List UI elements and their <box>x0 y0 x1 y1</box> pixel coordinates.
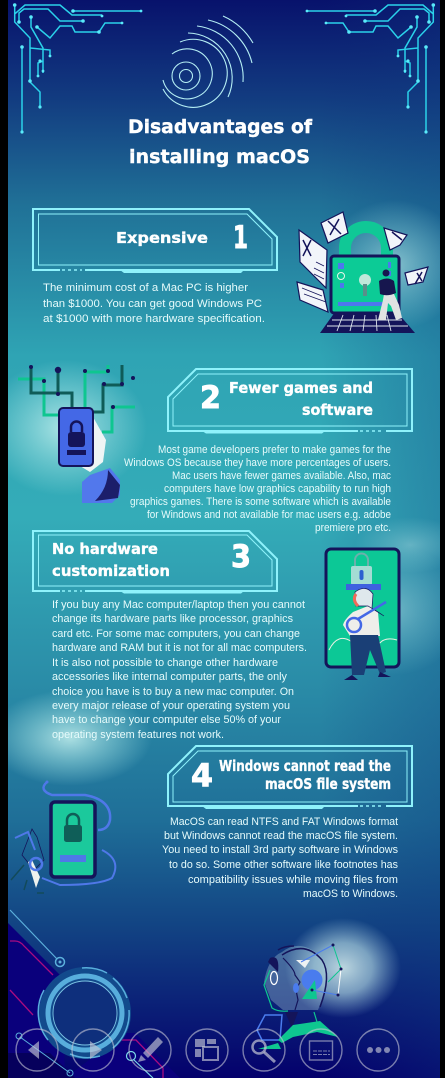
circuit: top right <box>306 3 435 134</box>
panel: section 2 header: 2 <box>200 380 221 416</box>
text: section 2 body: Most game developers prefer to make games for the <box>158 444 391 456</box>
text: section 2 body <box>124 444 391 534</box>
text: section 4 body: to do so. Some other software like footnotes has <box>169 859 398 871</box>
icon: previous <box>16 1029 58 1071</box>
icon: pen <box>129 1029 171 1071</box>
title: Disadvantages of <box>128 116 313 138</box>
text: section 3 body: choice you have is to buy a new mac computer. On <box>52 686 294 698</box>
panel: section 4 header: macOS file system <box>265 775 391 793</box>
panel: section 3 header <box>33 531 277 594</box>
panel: section 3 header: 3 <box>231 539 251 575</box>
text: section 1 body: at $1000 with more hardware specification. <box>43 313 265 325</box>
text: section 4 body: MacOS can read NTFS and FAT Windows format <box>170 816 398 828</box>
panel: section 4 header: Windows cannot read the <box>219 757 391 775</box>
text: section 1 body <box>43 282 265 325</box>
text: section 4 body: macOS to Windows. <box>303 888 398 900</box>
panel: section 2 header <box>168 369 412 434</box>
text: section 3 body: have to change your computer else 50% of your <box>52 714 281 726</box>
text: section 3 body: accessories like internal computer parts, the only <box>52 671 287 683</box>
illustration: head with network <box>257 944 342 1049</box>
panel: section 3 header: customization <box>52 562 170 580</box>
text: section 4 body <box>162 816 398 900</box>
panel: section 1 header: Expensive <box>116 229 208 247</box>
text: section 3 body: If you buy any Mac computer/laptop then you cannot <box>52 599 305 611</box>
text: section 4 body: compatibility issues while moving files from <box>188 874 398 886</box>
icon: concentric signal arcs <box>163 16 253 107</box>
title <box>128 116 313 168</box>
text: section 4 body: You need to install 3rd party software in Windows <box>162 844 398 856</box>
icon: magnifier <box>243 1029 285 1071</box>
icon: phone with padlock and small figure <box>11 780 115 893</box>
text: section 2 body: Mac users have fewer games available. Also, mac <box>172 470 391 482</box>
circuit: top left <box>13 3 142 134</box>
text: section 2 body: Windows OS because they have more percentages of users. <box>124 457 391 469</box>
text: section 3 body: every major release of your operating system you <box>52 700 290 712</box>
panel: section 1 header: 1 <box>233 220 248 256</box>
text: section 3 body: hardware and RAM but it is not for all mac computers. <box>52 642 307 654</box>
text: section 2 body: graphics games. There is some software which is available <box>130 496 391 508</box>
decoration: bottom left tech ring <box>8 910 180 1078</box>
icon: slides <box>186 1029 228 1071</box>
text: section 4 body: but Windows cannot read the macOS file system. <box>164 830 398 842</box>
icon: more <box>357 1029 399 1071</box>
text: section 3 body: operating system features not work. <box>52 729 224 741</box>
icon: phone with circuit lines and hand <box>18 365 135 503</box>
text: section 1 body: than $1000. You can get good Windows PC <box>43 298 262 310</box>
icon: phone with person holding key <box>326 549 399 680</box>
panel: section 1 header <box>33 209 277 273</box>
panel: section 4 header <box>168 746 412 809</box>
title: installing macOS <box>129 146 310 168</box>
text: section 2 body: computers have low graphics capability to run high <box>164 483 391 495</box>
icon: next <box>72 1029 114 1071</box>
text: section 3 body: change its hardware parts like processor, graphics <box>52 613 293 625</box>
icon: subtitles <box>300 1029 342 1071</box>
panel: section 2 header: Fewer games and <box>229 379 373 397</box>
text: section 2 body: for Windows and not available for mac users e.g. adobe <box>147 509 391 521</box>
text: section 3 body: It is also not possible to change other hardware <box>52 657 278 669</box>
toolbar: presentation controls <box>16 1029 399 1071</box>
icon: laptop with padlock and person <box>297 212 428 333</box>
text: section 2 body: premiere pro etc. <box>315 522 391 534</box>
panel: section 2 header: software <box>302 401 373 419</box>
text: section 3 body: card etc. For some mac computers, you can change <box>52 628 300 640</box>
panel: section 4 header: 4 <box>191 758 213 794</box>
text: section 1 body: The minimum cost of a Mac PC is higher <box>43 282 248 294</box>
text: section 3 body <box>52 599 307 741</box>
panel: section 3 header: No hardware <box>52 540 158 558</box>
